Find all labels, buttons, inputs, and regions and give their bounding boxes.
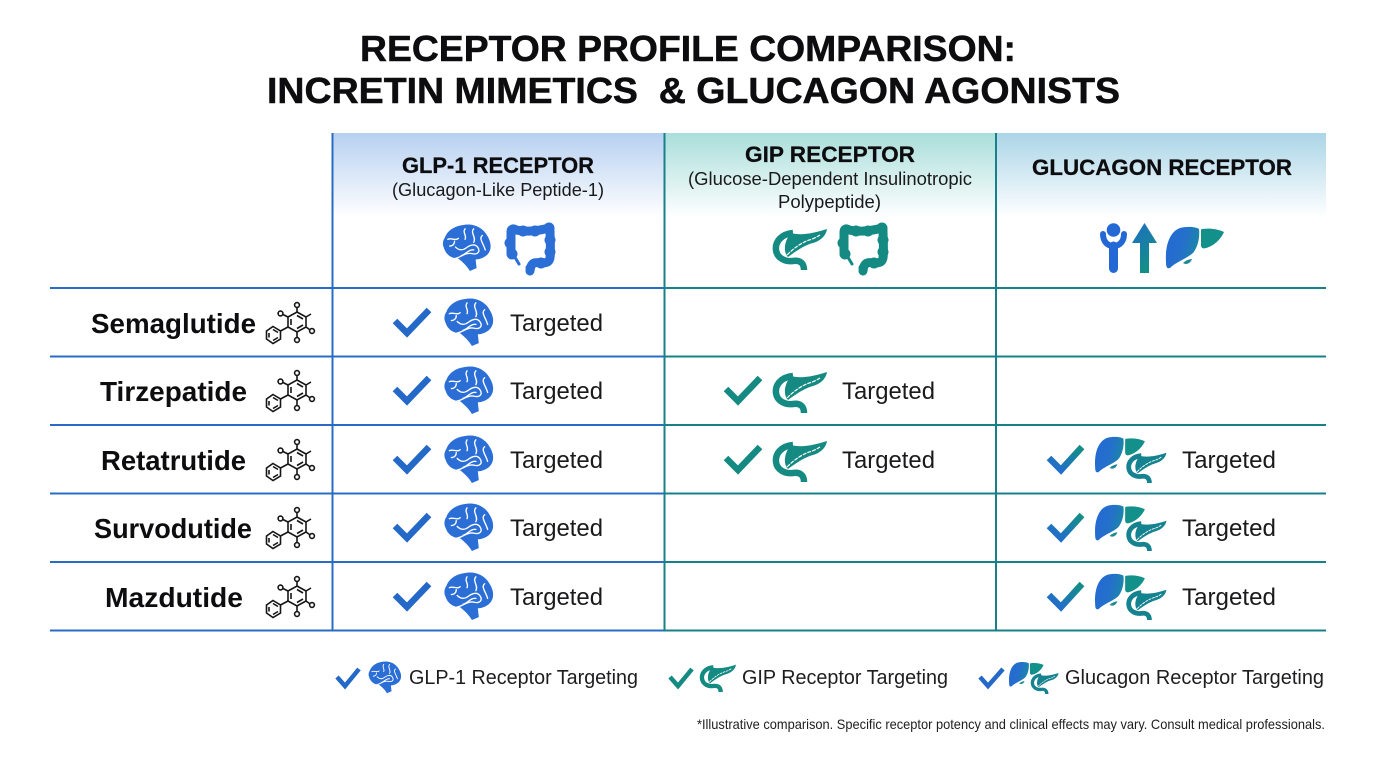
GIP target cell: Targeted xyxy=(842,378,935,405)
drug name: Tirzepatide xyxy=(100,376,247,407)
icon: person xyxy=(1103,223,1124,268)
icon: molecule xyxy=(266,577,314,618)
legend item: glucagon: Glucagon Receptor Targeting xyxy=(1065,667,1324,689)
GLP-1 target cell: Targeted xyxy=(510,515,603,542)
heading: glucagon receptor: GLUCAGON RECEPTOR xyxy=(1032,155,1292,180)
row: Retatrutide xyxy=(101,435,1276,483)
drug name: Survodutide xyxy=(94,513,252,544)
glucagon target cell: Targeted xyxy=(1182,447,1276,474)
icon: intestine xyxy=(838,222,888,272)
GLP-1 target cell: Targeted xyxy=(510,584,603,611)
icon: pancreas xyxy=(776,229,827,270)
GIP target cell xyxy=(726,372,935,413)
GLP-1 target cell xyxy=(395,435,603,483)
comparison table xyxy=(50,133,1326,631)
legend item: glucagon xyxy=(980,662,1324,694)
GLP-1 target cell xyxy=(395,298,603,346)
GLP-1 target cell xyxy=(395,366,603,414)
heading: GLP-1 receptor: GLP-1 RECEPTOR xyxy=(402,153,594,178)
row: Mazdutide xyxy=(105,572,1276,620)
icon: molecule xyxy=(266,508,314,548)
subheading: GLP-1 full name: (Glucagon-Like Peptide-1) xyxy=(392,180,604,200)
panel: glucagon column header xyxy=(997,133,1326,273)
glucagon target cell xyxy=(1049,574,1276,620)
subheading: GIP full name: (Glucose-Dependent Insulinotropic xyxy=(688,169,972,189)
legend xyxy=(337,661,1324,694)
legend item: GLP-1 xyxy=(337,661,638,693)
legend item: GIP xyxy=(670,665,948,692)
legend item: GIP: GIP Receptor Targeting xyxy=(742,667,948,689)
icon: brain xyxy=(443,224,491,271)
title xyxy=(267,28,1120,111)
GIP target cell: Targeted xyxy=(842,447,935,474)
icon: molecule xyxy=(266,440,314,480)
GLP-1 target cell xyxy=(395,572,603,620)
icon: molecule xyxy=(266,371,314,412)
row: Survodutide xyxy=(94,503,1276,551)
panel: GLP-1 column header xyxy=(333,133,664,272)
legend item: GLP-1: GLP-1 Receptor Targeting xyxy=(409,667,638,689)
icon: intestine xyxy=(504,222,556,272)
drug name: Mazdutide xyxy=(105,582,243,613)
glucagon target cell xyxy=(1049,505,1276,551)
footnote: *Illustrative comparison. Specific receptor potency and clinical effects may vary. Consult medical professionals. xyxy=(697,716,1325,732)
heading: GIP receptor: GIP RECEPTOR xyxy=(745,142,915,167)
icon: up arrow xyxy=(1132,223,1157,273)
icon: liver xyxy=(1166,227,1224,268)
subheading: GIP full name: Polypeptide) xyxy=(778,192,881,212)
GIP target cell xyxy=(726,441,935,482)
drug name: Semaglutide xyxy=(91,308,256,339)
glucagon target cell xyxy=(1049,437,1276,483)
subheading: GIP full name xyxy=(688,169,972,212)
title: INCRETIN MIMETICS & GLUCAGON AGONISTS xyxy=(267,70,1120,111)
GLP-1 target cell: Targeted xyxy=(510,447,603,474)
GLP-1 target cell: Targeted xyxy=(510,310,603,337)
drug name: Retatrutide xyxy=(101,445,246,476)
row: Semaglutide xyxy=(91,298,603,346)
icon: molecule xyxy=(266,303,314,344)
glucagon target cell: Targeted xyxy=(1182,584,1276,611)
GLP-1 target cell xyxy=(395,503,603,551)
row: Tirzepatide xyxy=(100,366,935,414)
GLP-1 target cell: Targeted xyxy=(510,378,603,405)
title: RECEPTOR PROFILE COMPARISON: xyxy=(360,28,1016,69)
panel: GIP column header xyxy=(665,133,996,272)
glucagon target cell: Targeted xyxy=(1182,515,1276,542)
